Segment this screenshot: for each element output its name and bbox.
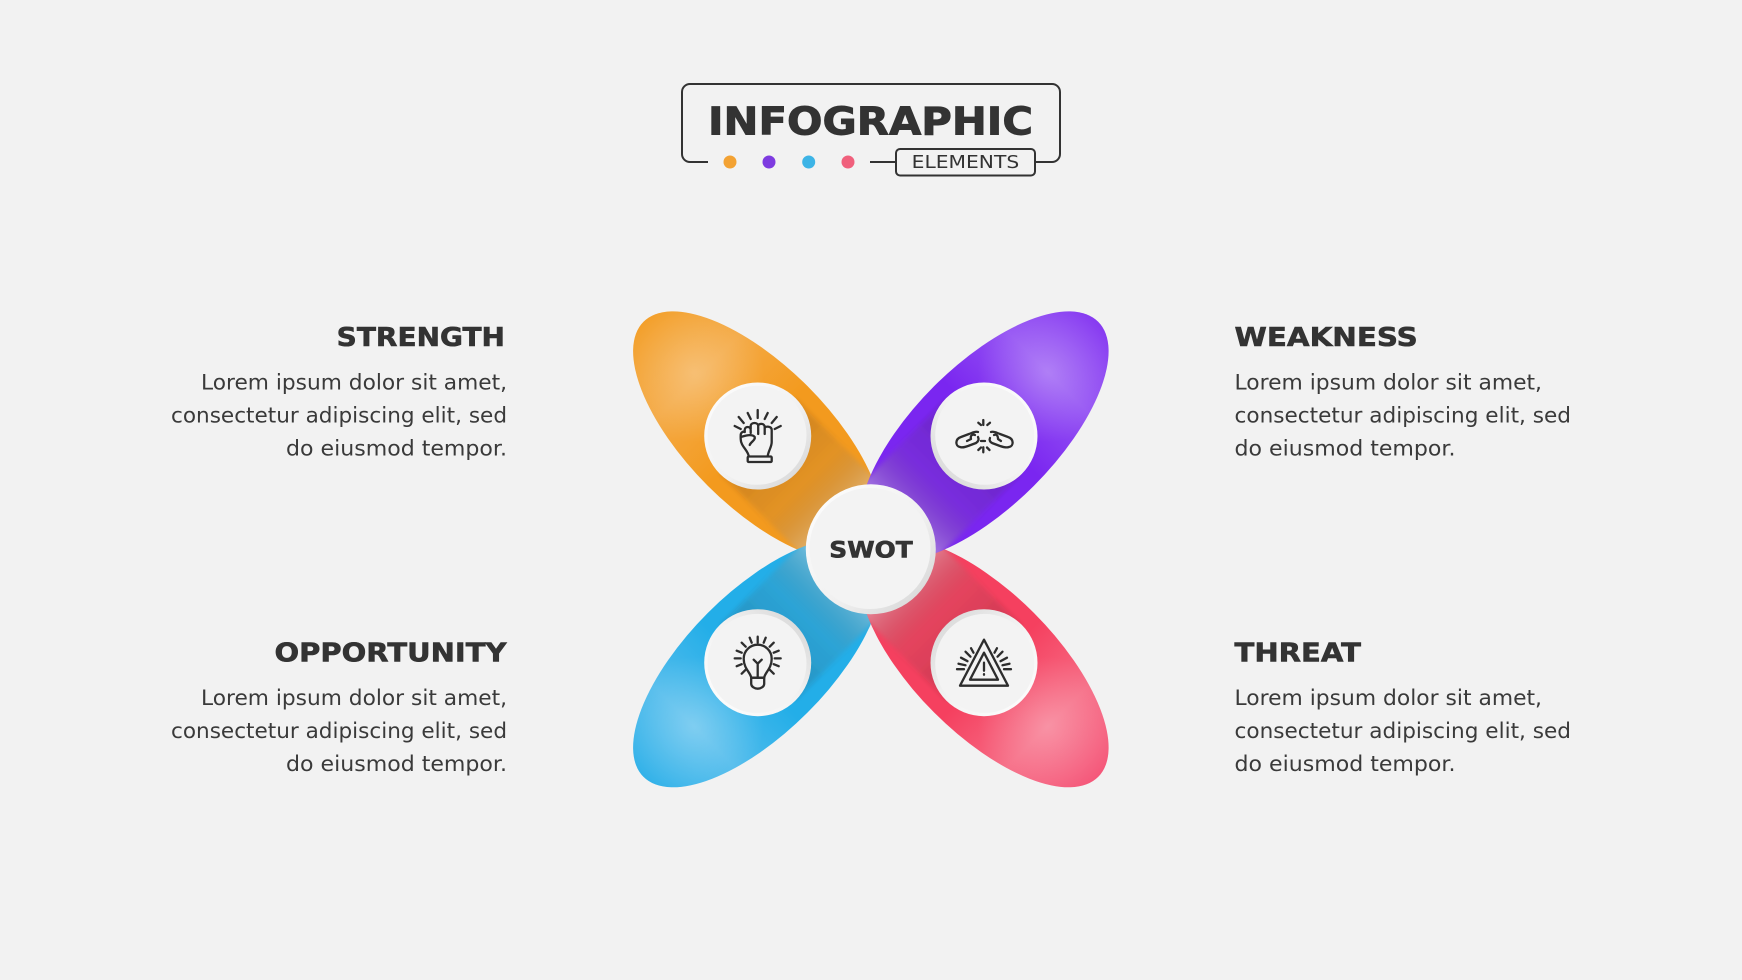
subtitle tag: ELEMENTS xyxy=(912,153,1019,173)
body: opportunity: do eiusmod tempor. xyxy=(286,752,507,777)
icon disc: weakness broken chain xyxy=(908,360,1060,512)
text block: weakness xyxy=(1234,323,1571,462)
icon disc: strength fist xyxy=(682,360,833,512)
title text: INFOGRAPHIC xyxy=(708,100,1033,144)
centre label: SWOT xyxy=(829,538,913,563)
body: weakness xyxy=(1234,370,1571,462)
body: opportunity: consectetur adipiscing elit, sed xyxy=(171,719,507,744)
body: weakness: do eiusmod tempor. xyxy=(1234,436,1456,462)
body: threat xyxy=(1234,686,1571,777)
petal: strength orange xyxy=(633,311,871,550)
heading: opportunity: OPPORTUNITY xyxy=(274,639,508,669)
centre disc: SWOT xyxy=(779,457,963,641)
text block: strength xyxy=(171,323,507,462)
body: strength: consectetur adipiscing elit, sed xyxy=(171,404,507,428)
body: threat: consectetur adipiscing elit, sed xyxy=(1234,719,1571,744)
icon: broken chain link xyxy=(956,420,1013,452)
title badge xyxy=(682,84,1060,176)
heading: strength: STRENGTH xyxy=(337,323,505,353)
heading: threat: THREAT xyxy=(1234,639,1361,669)
subtitle tag xyxy=(896,149,1035,176)
text block: opportunity xyxy=(171,639,508,777)
body: weakness: Lorem ipsum dolor sit amet, xyxy=(1234,370,1542,396)
body: threat: Lorem ipsum dolor sit amet, xyxy=(1234,686,1542,711)
body: strength xyxy=(171,370,507,462)
text block: threat xyxy=(1234,639,1571,777)
body: strength: do eiusmod tempor. xyxy=(286,436,507,462)
title colour dots xyxy=(724,156,854,168)
petal: opportunity blue xyxy=(633,546,871,788)
icon: raised fist xyxy=(735,410,781,462)
body: threat: do eiusmod tempor. xyxy=(1234,752,1456,777)
petal: threat red xyxy=(866,549,1109,788)
petal: weakness purple xyxy=(866,311,1109,553)
body: opportunity xyxy=(171,686,507,777)
icon disc: threat warning triangle xyxy=(908,587,1060,738)
body: weakness: consectetur adipiscing elit, sed xyxy=(1234,404,1571,428)
icon disc: opportunity light bulb xyxy=(682,587,833,738)
title frame xyxy=(682,84,1060,162)
icon: light bulb xyxy=(735,637,781,689)
icon: warning triangle xyxy=(957,640,1011,686)
body: opportunity: Lorem ipsum dolor sit amet, xyxy=(201,686,507,711)
body: strength: Lorem ipsum dolor sit amet, xyxy=(201,370,507,396)
heading: weakness: WEAKNESS xyxy=(1234,323,1418,353)
